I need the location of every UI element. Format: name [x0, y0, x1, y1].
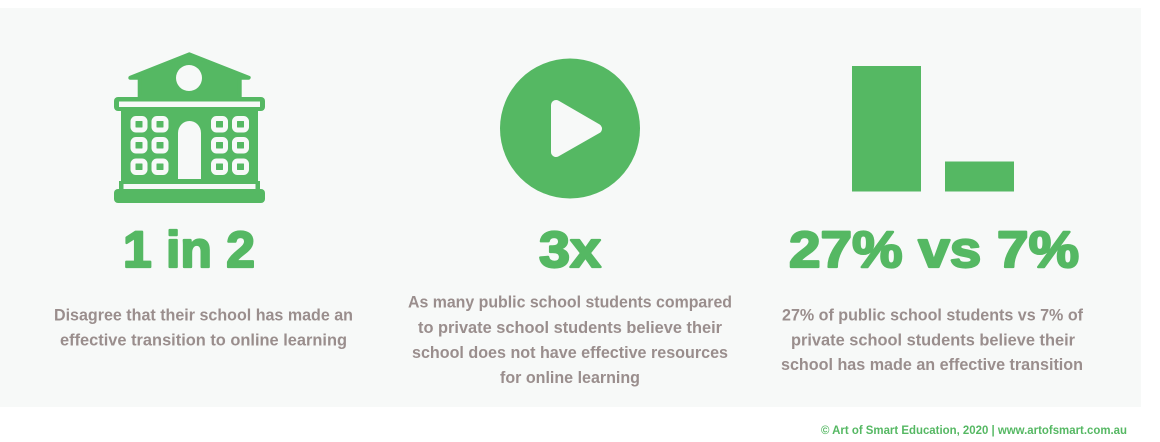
heading: 1 in 2: 1 in 2 — [123, 221, 255, 278]
text block: column 3: 27% of public school students vs 7% of — [782, 306, 1083, 324]
text block: column 3 — [781, 306, 1083, 374]
text block: column 3: school has made an effective transition — [781, 356, 1083, 374]
text block: column 3: private school students believe their — [791, 332, 1076, 350]
icon: school building — [114, 54, 265, 203]
footer credit: © Art of Smart Education, 2020 | www.artofsmart.com.au — [821, 425, 1127, 437]
text block: column 2: to private school students believe their — [418, 319, 723, 337]
text block: column 2: school does not have effective resources — [412, 344, 728, 362]
text block: column 1: Disagree that their school has made an — [54, 306, 353, 324]
text block: column 2: for online learning — [500, 369, 640, 387]
text block: column 2 — [408, 294, 732, 387]
text block: column 2: As many public school students compared — [408, 294, 732, 312]
heading: 27% vs 7%: 27% vs 7% — [789, 221, 1079, 278]
bar chart: public vs private — [852, 66, 1014, 192]
heading: 3x: 3x — [539, 221, 601, 278]
text block: column 1 — [54, 306, 353, 350]
text block: column 1: effective transition to online learning — [60, 332, 347, 350]
icon: play button — [500, 58, 640, 198]
